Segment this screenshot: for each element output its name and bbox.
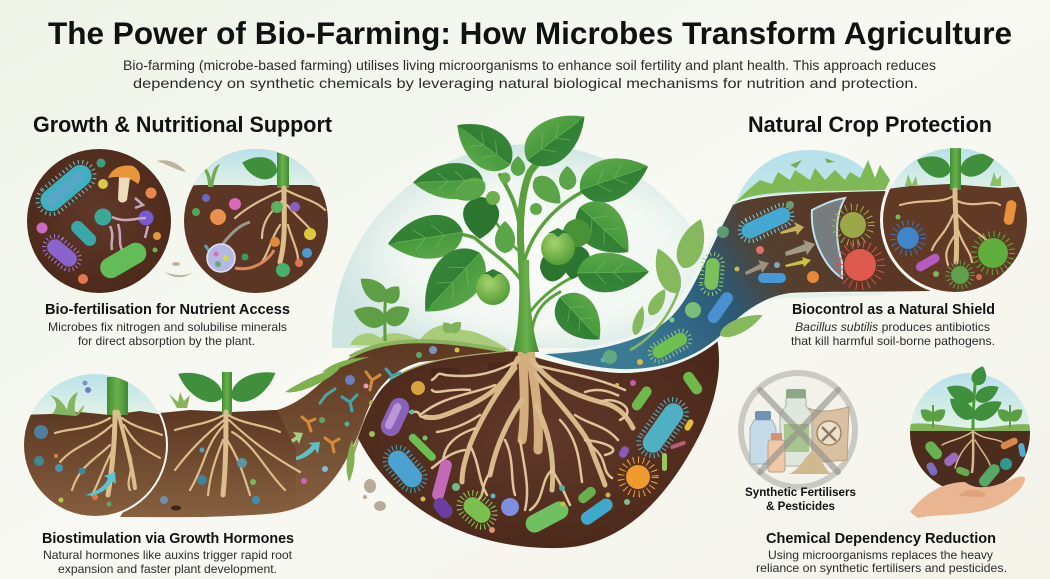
panel: bio-fertilisation microbes circle [27, 149, 171, 293]
pathogens [835, 207, 871, 243]
powder pile [789, 452, 831, 474]
stream and sky of crop protection panel [537, 150, 930, 373]
caption: biocontrol [791, 301, 995, 348]
caption: biocontrol: Biocontrol as a Natural Shield [792, 301, 995, 318]
grass [733, 160, 890, 205]
left bottle [750, 420, 776, 464]
panel: biostimulation circle [20, 370, 170, 520]
caption: chemical dependency: Chemical Dependency Reduction [766, 530, 996, 547]
caption: biostimulation [42, 530, 294, 576]
intro text: dependency on synthetic chemicals by leveraging natural biological mechanisms for nutrition and protection. [133, 75, 918, 91]
main root system [410, 350, 633, 510]
caption: chemical dependency: reliance on synthetic fertilisers and pesticides. [756, 561, 1007, 575]
heading: growth and nutritional support: Growth & Nutritional Support [33, 112, 333, 137]
panel: bio-fertilisation roots circle [180, 145, 330, 293]
label: synthetic fertilisers [745, 487, 856, 513]
caption: biocontrol: Bacillus subtilis produces antibiotics [795, 320, 990, 334]
growth arrows on band [268, 432, 303, 444]
caption: bio-fertilisation: for direct absorption by the plant. [78, 334, 255, 348]
side vine leaves [630, 215, 766, 350]
caption: chemical dependency: Using microorganisms replaces the heavy [768, 548, 993, 562]
heading: natural crop protection: Natural Crop Protection [748, 112, 992, 137]
panel: plant in hand [905, 364, 1035, 518]
fertiliser bag [808, 407, 849, 463]
caption: biostimulation: Biostimulation via Growth Hormones [42, 530, 294, 547]
caption: bio-fertilisation: Microbes fix nitrogen and solubilise minerals [48, 320, 287, 334]
attack arrows [745, 222, 815, 275]
leaves [462, 196, 592, 282]
prohibition cross [760, 390, 838, 472]
bits between bottom and center [363, 479, 386, 511]
label: synthetic fertilisers: & Pesticides [766, 501, 835, 513]
panel: biocontrol circle [880, 145, 1030, 295]
panel: chemical-free illustration [741, 373, 855, 487]
natural shield [812, 198, 845, 278]
central sky circle [332, 144, 710, 348]
caption: biocontrol: that kill harmful soil-borne pathogens. [791, 334, 995, 348]
caption: bio-fertilisation: Bio-fertilisation for Nutrient Access [45, 301, 290, 318]
caption: biostimulation: expansion and faster plant development. [58, 562, 277, 576]
caption: biostimulation: Natural hormones like auxins trigger rapid root [43, 548, 293, 562]
caption: bio-fertilisation [45, 301, 290, 348]
caption: chemical dependency [756, 530, 1007, 575]
title: The Power of Bio-Farming: How Microbes Transform Agriculture [48, 15, 1012, 51]
small bottle [768, 440, 785, 472]
hand [910, 476, 1025, 518]
main plant [385, 100, 655, 353]
stems [420, 155, 610, 350]
microbes in stream [736, 201, 796, 245]
microbes in central soil [369, 370, 704, 536]
left connecting soil band [120, 341, 512, 517]
label: synthetic fertilisers: Synthetic Fertilisers [745, 487, 856, 499]
panel: biostimulation band [125, 363, 307, 517]
decorative swooshes between circles [157, 160, 193, 277]
tomatoes [563, 219, 591, 247]
intro text: Bio-farming (microbe-based farming) utilises living microorganisms to enhance soil fertility and plant health. This approach reduces [123, 57, 936, 73]
large bottle [780, 398, 812, 466]
molecules on band [302, 369, 400, 452]
central soil with roots [358, 338, 719, 548]
intro text [123, 57, 936, 91]
small background plant and hills [350, 272, 510, 350]
